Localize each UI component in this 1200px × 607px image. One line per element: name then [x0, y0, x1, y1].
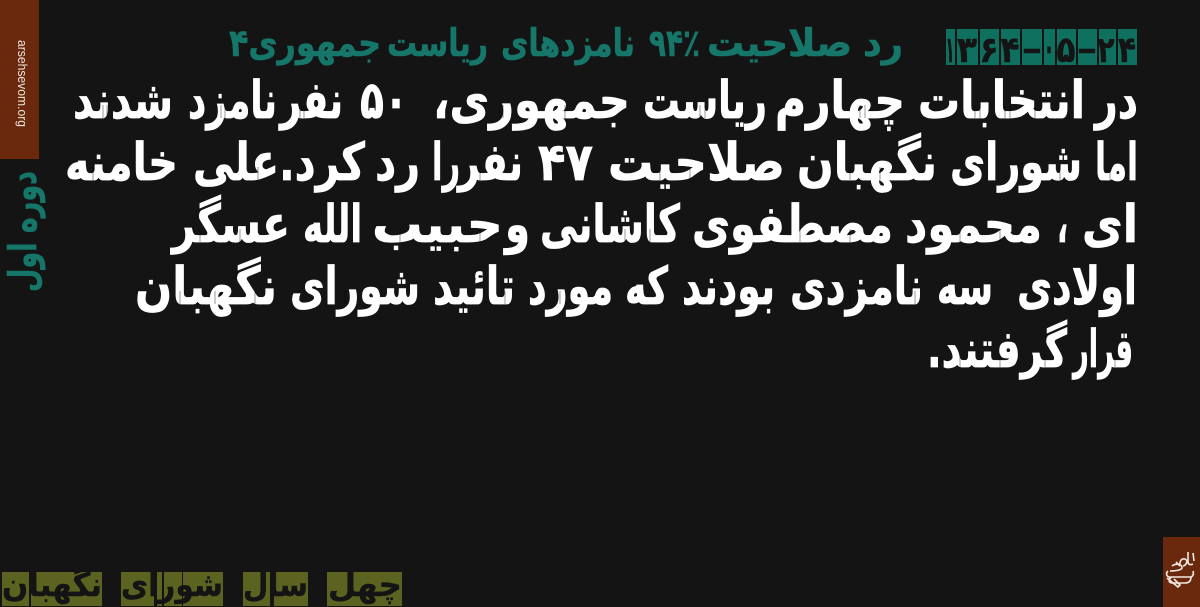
line 3: حبیب	[372, 195, 503, 255]
line 1: جمهوری،	[433, 71, 630, 131]
line 3: و	[503, 195, 530, 255]
line 1: در	[1093, 71, 1138, 131]
panel: website tab	[0, 0, 39, 159]
line 2: را	[432, 133, 460, 193]
line 2: خامنه	[65, 133, 178, 193]
line 3: محمود	[905, 195, 1042, 255]
date badge: ۳	[957, 30, 977, 71]
line 2: کرد.علی	[193, 133, 366, 193]
date badge: ۴	[1118, 30, 1136, 71]
line 1	[73, 71, 1138, 131]
date badge: ۲	[1098, 30, 1115, 71]
line 3	[170, 194, 1138, 255]
logo panel	[1163, 537, 1200, 607]
line 2: ۴۷	[538, 133, 593, 193]
date badge: –	[1022, 30, 1042, 68]
footer series title: چهل	[328, 565, 402, 605]
line 2: نفر	[456, 133, 523, 193]
line 5: قرار	[1071, 320, 1133, 380]
icon: calligraphic logo	[1167, 552, 1194, 587]
date badge: ۰	[1044, 28, 1054, 69]
line 3: ای	[1082, 195, 1138, 255]
main text block	[65, 71, 1138, 380]
line 1: ۵۰	[360, 71, 408, 131]
line 4: نگهبان	[135, 256, 277, 317]
heading: ۹۴٪	[649, 21, 700, 65]
line 4: شورای	[290, 257, 420, 317]
line 1: نفر	[278, 71, 343, 131]
line 4	[135, 256, 1137, 317]
line 2: شورای	[950, 133, 1082, 193]
line 2: صلاحیت	[608, 133, 785, 193]
heading: ریاست	[387, 21, 488, 65]
date badge: ۴	[1000, 30, 1020, 71]
heading: صلاحیت	[707, 21, 852, 65]
footer series title: شورای	[121, 565, 223, 605]
line 5: گرفتند.	[927, 319, 1068, 380]
line 1: شدند	[73, 71, 173, 131]
line 2	[65, 132, 1138, 193]
line 2: نگهبان	[797, 132, 937, 193]
line 4: بودند	[682, 257, 775, 317]
line 3: ،	[1057, 195, 1068, 255]
line 4: که	[625, 257, 669, 317]
footer series title: نگهبان	[2, 565, 102, 605]
footer series title: سال	[243, 565, 308, 604]
footer series title	[2, 565, 402, 606]
line 1: ریاست	[643, 71, 767, 131]
line 1: چهارم	[775, 71, 905, 131]
date badge: ۱	[946, 30, 954, 71]
line 3: کاشانی	[540, 195, 681, 255]
line 2: اما	[1095, 133, 1138, 193]
line 3: عسگر	[170, 194, 290, 255]
line 1: انتخابات	[918, 71, 1085, 131]
date badge: –	[1077, 30, 1097, 68]
line 2: رد	[375, 133, 420, 193]
heading	[229, 21, 903, 65]
line 3: الله	[303, 195, 362, 255]
line 4: سه	[937, 257, 993, 317]
line 4: نامزدی	[790, 257, 923, 317]
line 4: تائید	[433, 257, 515, 317]
panel: website tab: arsehsevom.org	[15, 40, 30, 127]
date badge: ۵	[1056, 30, 1076, 71]
date badge	[946, 28, 1137, 71]
date badge: ۶	[980, 30, 998, 71]
heading: جمهوری۴	[229, 21, 381, 65]
heading: رد	[863, 21, 903, 65]
line 1: نامزد	[188, 71, 277, 131]
line 4: مورد	[528, 257, 613, 317]
line 3: مصطفوی	[692, 195, 893, 255]
heading: نامزدهای	[501, 21, 635, 65]
vertical label: period: دوره اول	[1, 171, 46, 292]
line 4: اولادی	[1017, 257, 1137, 317]
